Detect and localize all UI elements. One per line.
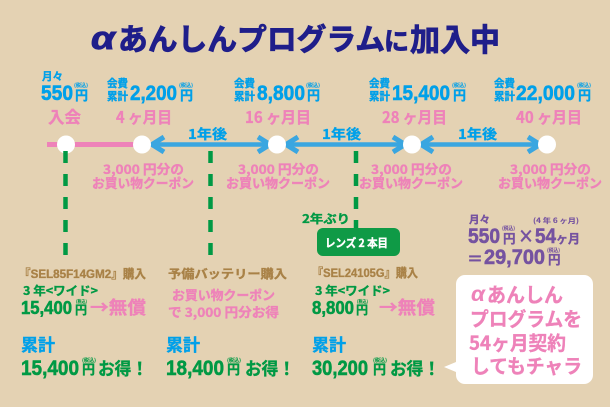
column 2: battery purchase: で 3,000 円分お得: [168, 302, 279, 321]
column 2: battery purchase: 予備バッテリー購入: [168, 265, 287, 282]
column 3: second lens purchase: 8,800: [312, 298, 354, 318]
column 1: lens purchase: 『SEL85F14GM2』購入: [19, 266, 146, 281]
total 1: [21, 331, 148, 381]
dashed connectors: [66, 151, 356, 256]
fee: 2,200 yen: [107, 75, 193, 105]
monthly cost calculation: (税込): [547, 247, 560, 254]
fee: 8,800 yen: 累計: [234, 88, 255, 104]
year labels: [188, 123, 498, 143]
fee: 2,200 yen: 累計: [107, 88, 128, 104]
total 3: (税込): [373, 357, 387, 364]
coupon notes: 3,000 円分の: [103, 159, 184, 178]
total 2: 18,400: [166, 357, 224, 380]
monthly cost calculation: [467, 212, 580, 270]
column 2: battery purchase: お買い物クーポン: [172, 285, 275, 304]
fee: join 550 yen: 550: [41, 82, 73, 105]
monthly cost calculation: 円: [503, 228, 516, 247]
month labels: 4 ヶ月目: [116, 104, 172, 128]
title: [91, 15, 500, 60]
fee: 15,400 yen: [369, 75, 466, 105]
total 3: 30,200: [312, 357, 368, 380]
fee: 15,400 yen: 円: [453, 85, 466, 104]
coupon notes: 3,000 円分の: [238, 159, 319, 178]
fee: 2,200 yen: (税込): [179, 82, 193, 89]
fee: 22,000 yen: 円: [578, 85, 591, 104]
column 3: second lens purchase: 『SEL24105G』購入: [312, 265, 418, 280]
column 1: lens purchase: 3 年<ワイド>: [23, 282, 98, 299]
fee: 8,800 yen: [234, 75, 320, 105]
fee: 22,000 yen: 会費: [494, 75, 515, 91]
fee: join 550 yen: [41, 68, 88, 105]
coupon notes: お買い物クーポン: [92, 173, 194, 192]
timeline nodes: [57, 136, 556, 154]
month labels: [48, 104, 582, 128]
total 1: (税込): [82, 357, 96, 364]
total 3: [312, 331, 440, 381]
month labels: 入会: [48, 104, 82, 128]
fee: 22,000 yen: [494, 75, 591, 105]
title: α: [91, 20, 116, 56]
callout bubble: あんしん: [487, 279, 563, 308]
monthly cost calculation: 月々: [469, 212, 490, 227]
coupon notes: お買い物クーポン: [498, 173, 602, 192]
monthly cost calculation: 29,700: [484, 246, 545, 269]
column 1: lens purchase: [19, 266, 146, 320]
arrow: year 3: [421, 137, 540, 152]
fee: 15,400 yen: 累計: [369, 88, 390, 104]
column 1: lens purchase: 15,400: [21, 298, 72, 318]
callout bubble: してもチャラ: [471, 350, 582, 379]
year labels: 1年後: [458, 123, 498, 143]
monthly cost calculation: (4 年 6 ヶ月): [533, 216, 579, 226]
fee: 15,400 yen: 会費: [369, 75, 390, 91]
fee: 22,000 yen: 累計: [494, 88, 515, 104]
total 2: [166, 331, 295, 381]
timeline line: [47, 142, 137, 147]
column 3: second lens purchase: (税込): [357, 298, 368, 305]
fee: 2,200 yen: 2,200: [130, 82, 177, 105]
callout bubble: 54ヶ月契約: [469, 327, 566, 356]
total 2: (税込): [227, 357, 241, 364]
monthly cost calculation: 円: [548, 249, 561, 268]
fee: 22,000 yen: 22,000: [516, 82, 575, 105]
monthly cost calculation: 550: [468, 225, 500, 248]
fee: 2,200 yen: 円: [180, 85, 193, 104]
lens note: 2年ぶり: [302, 210, 350, 227]
fee: 2,200 yen: 会費: [107, 75, 128, 91]
coupon notes: 3,000 円分の: [510, 159, 591, 178]
coupon notes: [92, 159, 602, 192]
monthly cost calculation: ヶ月: [556, 228, 580, 247]
column 3: second lens purchase: [312, 265, 435, 320]
total 1: 累計: [21, 331, 55, 356]
coupon notes: お買い物クーポン: [359, 173, 463, 192]
total 2: お得！: [245, 356, 295, 381]
total 3: 円: [373, 359, 386, 378]
total 3: 累計: [312, 331, 346, 356]
title: に: [384, 22, 409, 58]
month labels: 28 ヶ月目: [382, 104, 447, 128]
callout bubble: α: [471, 283, 486, 306]
title: 加入中: [410, 15, 500, 60]
total 2: 累計: [166, 331, 200, 356]
monthly cost calculation: ＝: [467, 245, 483, 270]
total 2: 円: [227, 359, 240, 378]
fee: 8,800 yen: 8,800: [257, 82, 305, 105]
callout bubble: プログラムを: [470, 303, 582, 332]
total 3: お得！: [390, 356, 440, 381]
fee: 15,400 yen: (税込): [452, 82, 466, 89]
column 3: second lens purchase: →無償: [379, 294, 435, 320]
month labels: 16 ヶ月目: [245, 104, 311, 128]
column 1: lens purchase: 円: [75, 301, 87, 318]
column 2: battery purchase: [168, 265, 287, 321]
year labels: 1年後: [188, 123, 228, 143]
total 1: 円: [82, 359, 95, 378]
month labels: 40 ヶ月目: [516, 104, 582, 128]
monthly cost calculation: (税込): [502, 225, 515, 232]
arrow: year 2: [286, 137, 405, 152]
fee: join 550 yen: 円: [75, 85, 88, 104]
badge: second lens: [317, 228, 400, 256]
monthly cost calculation: 54: [535, 225, 556, 248]
fee: join 550 yen: (税込): [74, 82, 88, 89]
arrow: year 1: [152, 137, 270, 152]
coupon notes: お買い物クーポン: [226, 173, 330, 192]
total 1: 15,400: [21, 357, 79, 380]
fee: 8,800 yen: 会費: [234, 75, 255, 91]
column 1: lens purchase: →無償: [90, 294, 146, 320]
total 1: お得！: [98, 356, 148, 381]
column 3: second lens purchase: 3 年<ワイド>: [315, 282, 390, 299]
fee: join 550 yen: 月々: [42, 68, 63, 84]
year labels: 1年後: [322, 123, 362, 143]
fee: 22,000 yen: (税込): [577, 82, 591, 89]
column 1: lens purchase: (税込): [76, 298, 87, 305]
column 3: second lens purchase: 円: [356, 301, 368, 318]
callout bubble: [444, 275, 593, 384]
fee: 15,400 yen: 15,400: [392, 82, 450, 105]
coupon notes: 3,000 円分の: [371, 159, 452, 178]
fee: 8,800 yen: (税込): [306, 82, 320, 89]
monthly cost calculation: ×: [518, 223, 534, 249]
fee: 8,800 yen: 円: [307, 85, 320, 104]
badge: second lens: レンズ 2 本目: [325, 235, 388, 251]
title: あんしんプログラム: [118, 15, 385, 59]
